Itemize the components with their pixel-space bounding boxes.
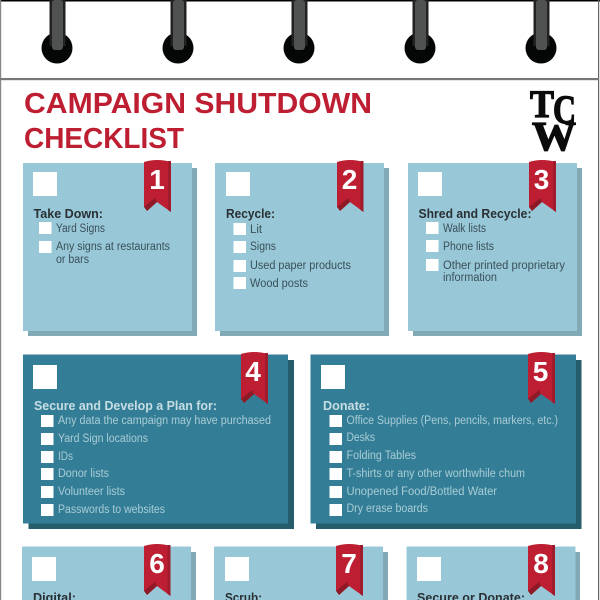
logo: TCW: C [553,87,576,132]
panel: step 5 donate: Office Supplies (Pens, pencils, markers, etc.) [346,415,558,427]
panel: step 4 secure and develop a plan: Passwords to websites [58,504,165,516]
title: CAMPAIGN SHUTDOWN [24,88,372,120]
panel: step 3 shred and recycle: 3 [534,164,549,195]
logo: TCW: W [532,113,576,159]
panel: step 4 secure and develop a plan: Any data the campaign may have purchased [58,415,271,427]
panel: step 3 shred and recycle: Other printed proprietary [443,260,565,272]
panel: step 4 secure and develop a plan: Volunteer lists [58,486,125,498]
panel: step 3 shred and recycle: information [443,272,497,284]
title: CHECKLIST [24,123,184,155]
panel: step 3 shred and recycle: Walk lists [443,223,486,235]
panel: step 1 take down [23,160,197,336]
panel: step 2 recycle [215,160,389,336]
panel: step 2 recycle: Wood posts [250,278,308,290]
panel: step 5 donate: Folding Tables [346,450,416,462]
panel: step 5 donate: T-shirts or any other worthwhile chum [346,468,525,480]
panel: step 7 scrub: 7 [341,548,357,579]
panel: step 5 donate: Dry erase boards [346,503,428,515]
panel: step 2 recycle: 2 [342,164,357,195]
panel: step 4 secure and develop a plan: Yard Sign locations [58,433,148,445]
panel: step 5 donate [310,352,582,529]
logo: TCW: T [530,83,554,126]
panel: step 6 digital [22,544,196,600]
panel: step 3 shred and recycle: Shred and Recycle: [418,206,532,221]
panel: step 5 donate: Donate: [323,398,370,413]
panel: step 2 recycle: Used paper products [250,260,351,272]
panel: step 1 take down: Any signs at restaurants [56,241,170,253]
panel: step 2 recycle: Recycle: [226,206,275,221]
panel: step 5 donate: Desks [346,432,375,444]
panel: step 4 secure and develop a plan: 4 [245,356,261,387]
panel: step 4 secure and develop a plan: IDs [58,451,73,463]
panel: step 1 take down: Yard Signs [56,223,105,235]
panel: step 1 take down: Take Down: [34,206,103,221]
panel: step 4 secure and develop a plan: Donor lists [58,468,109,480]
logo: TCW [530,83,576,159]
panel: step 3 shred and recycle: Phone lists [443,241,494,253]
panel: step 4 secure and develop a plan [23,352,294,529]
panel: step 1 take down: or bars [56,254,89,266]
panel: step 6 digital: 6 [149,548,165,579]
panel: step 1 take down: 1 [149,164,165,195]
panel: step 7 scrub [214,544,388,600]
panel: step 3 shred and recycle [408,160,582,336]
panel: step 5 donate: 5 [533,356,548,387]
panel: step 4 secure and develop a plan: Secure and Develop a Plan for: [34,398,217,413]
panel: step 2 recycle: Lit [250,224,263,236]
panel: step 8 secure or donate: 8 [533,548,549,579]
panel: step 2 recycle: Signs [250,241,276,253]
spiral binding rings [42,0,556,64]
title [24,88,372,155]
panel: step 5 donate: Unopened Food/Bottled Water [346,486,497,498]
panel: step 8 secure or donate [406,544,580,600]
